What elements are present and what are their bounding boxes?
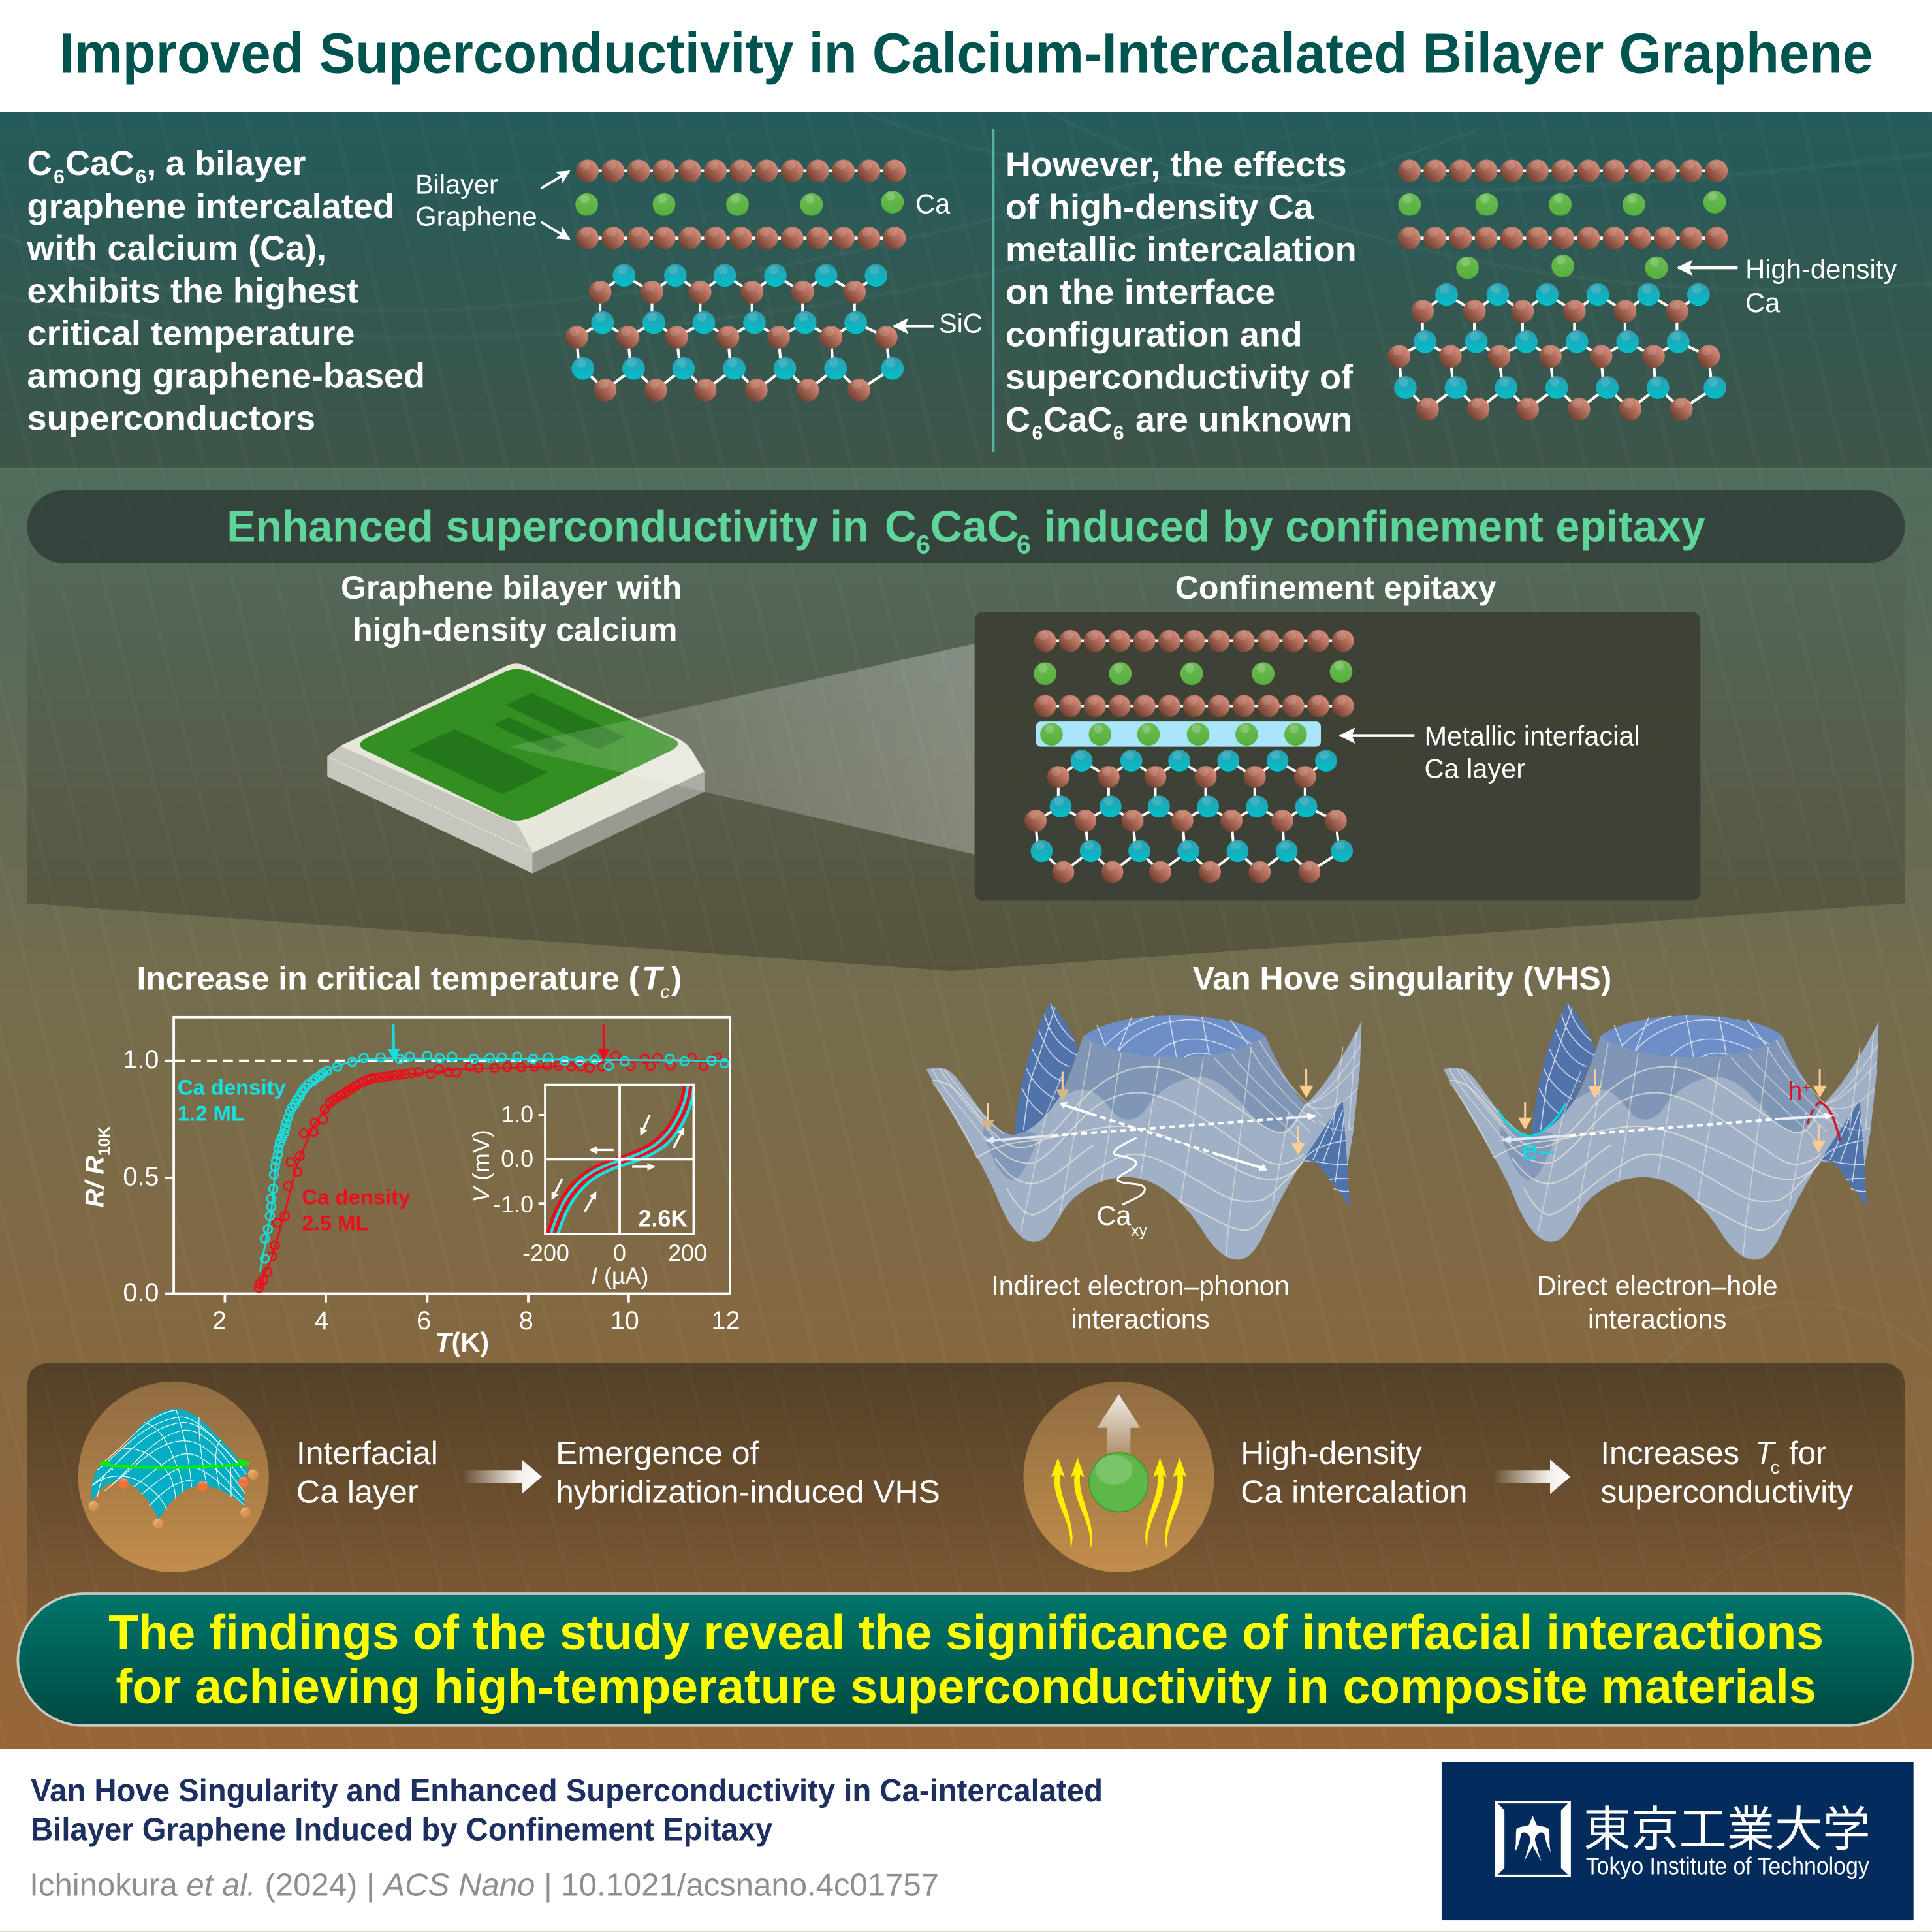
text block: C6CaC6 introduction: exhibits the highest [27, 272, 358, 310]
emblem [1495, 1801, 1571, 1877]
label: metallic interfacial Ca layer: Metallic interfacial [1425, 721, 1640, 752]
text block: C6CaC6 introduction: graphene intercalated [27, 187, 394, 226]
footer paper title: Bilayer Graphene Induced by Confinement Epitaxy [31, 1812, 773, 1847]
chart: R/R10K versus T [81, 1017, 740, 1357]
heading: increase in critical temperature: Increase in critical temperature ( [136, 960, 639, 996]
text: increases Tc: c [1771, 1457, 1780, 1478]
heading: increase in critical temperature: c [660, 981, 670, 1002]
footer paper title [31, 1773, 1103, 1847]
caption: indirect electron-phonon [991, 1270, 1290, 1334]
conclusion pill [18, 1594, 1913, 1726]
red series: 2.5 ML [259, 1056, 729, 1289]
heading: increase in critical temperature: ) [671, 960, 682, 996]
heading: Van Hove singularity: Van Hove singularity (VHS) [1193, 960, 1611, 996]
arrow: to high-density Ca [1678, 267, 1737, 268]
green Ca layer ring [101, 1461, 248, 1468]
icon: high-density Ca intercalation [1023, 1382, 1214, 1572]
dark pads [409, 693, 625, 795]
panel: background section of introduction [0, 112, 1932, 468]
x-axis labels: 10 [610, 1306, 639, 1335]
label: SiC: SiC [939, 308, 983, 339]
beam from chip to magnified view [509, 644, 975, 855]
calcium atoms [1034, 660, 1352, 685]
cyan series: 1.2 ML [260, 1056, 729, 1272]
y-axis labels: 0.5 [123, 1162, 159, 1191]
label: Ca density 1.2 ML: Ca density [178, 1075, 287, 1100]
interfacial calcium atoms [1040, 723, 1307, 746]
arrow: to SiC [894, 325, 934, 327]
heading: confinement epitaxy: Confinement epitaxy [1175, 569, 1497, 606]
inset y labels [493, 1101, 533, 1218]
arrow: peach markers [1518, 1069, 1827, 1153]
label: high-density Ca: High-density [1745, 253, 1897, 284]
metallic interfacial Ca band [1036, 721, 1321, 747]
footer paper title: Van Hove Singularity and Enhanced Superconductivity in Ca-intercalated [31, 1773, 1103, 1809]
3D band surface: indirect electron-phonon [926, 1002, 1362, 1259]
caption: indirect electron-phonon: Indirect electron–phonon [991, 1270, 1290, 1301]
inset temperature: 2.6K [639, 1206, 688, 1232]
panel: background section of results [0, 468, 1932, 1750]
conclusion text [108, 1605, 1824, 1714]
y-axis labels [123, 1045, 159, 1307]
text: increases Tc: Increases [1600, 1436, 1739, 1471]
SiC lattice [565, 264, 904, 402]
heading: enhanced superconductivity: CaC [930, 502, 1019, 551]
text block: unknown effects: CaC [1043, 400, 1113, 439]
text: high-density Ca intercalation: High-density [1241, 1436, 1422, 1471]
inset x labels: 0 [613, 1240, 626, 1266]
label: Ca density 1.2 ML [178, 1075, 287, 1125]
text block: unknown effects: 6 [1113, 423, 1124, 445]
arrow: peach markers [981, 1069, 1314, 1155]
footer background [0, 1749, 1932, 1932]
text block: C6CaC6 introduction: C [27, 144, 52, 183]
footer citation: Ichinokura et al. (2024) | ACS Nano | 10.1021/acsnano.4c01757 [29, 1867, 939, 1903]
text block: unknown effects: superconductivity of [1006, 358, 1353, 396]
text block: C6CaC6 introduction: 6 [54, 166, 65, 188]
y-axis title: 10K [96, 1126, 114, 1156]
caption: indirect electron-phonon: interactions [1071, 1303, 1210, 1334]
text: increases Tc [1600, 1436, 1854, 1510]
yellow flow arrows [1051, 1457, 1186, 1547]
text block: C6CaC6 introduction: critical temperature [27, 314, 355, 353]
x-axis labels: 4 [315, 1306, 329, 1335]
label: Ca xy phonon: Ca [1097, 1200, 1132, 1231]
text block: C6CaC6 introduction: CaC [65, 144, 135, 183]
curve: hole pocket [1806, 1102, 1841, 1141]
arrow: to upper graphene layer [541, 171, 569, 189]
x-axis labels [212, 1306, 740, 1335]
panel: key findings [27, 1363, 1905, 1664]
text: interfacial Ca layer [296, 1436, 438, 1510]
text block: unknown effects: on the interface [1006, 273, 1275, 311]
text block: C6CaC6 introduction: with calcium (Ca), [26, 229, 326, 268]
caption: direct electron-hole: interactions [1588, 1303, 1726, 1334]
conclusion text: The findings of the study reveal the significance of interfacial interactions [108, 1605, 1824, 1660]
label: hole: h [1788, 1077, 1802, 1105]
heading: graphene bilayer with high-density calcium: Graphene bilayer with [341, 569, 682, 606]
inset curves [547, 1082, 693, 1241]
SiC lattice [1387, 283, 1726, 420]
heading: increase in critical temperature: T [642, 960, 665, 996]
logo English name: Tokyo Institute of Technology [1586, 1852, 1869, 1879]
text block: C6CaC6 introduction: , a bilayer [147, 144, 306, 183]
text block: unknown effects: configuration and [1006, 315, 1303, 354]
lower graphene layer [1034, 695, 1354, 717]
label: Ca density 2.5 ML [302, 1185, 411, 1235]
arrow: cyan Tc marker [393, 1024, 394, 1060]
curve: electron pocket [1498, 1103, 1566, 1136]
icon: interfacial Ca layer surface [78, 1382, 269, 1572]
x-axis labels: 2 [212, 1306, 227, 1335]
text block: unknown effects: are unknown [1135, 400, 1352, 439]
caption: direct electron-hole [1537, 1270, 1778, 1334]
background: header white [0, 0, 1932, 112]
logo: Tokyo Institute of Technology [1442, 1762, 1914, 1920]
arrow: to lower graphene layer [541, 222, 569, 239]
text: increases Tc: superconductivity [1600, 1474, 1854, 1510]
label: metallic interfacial Ca layer: Ca layer [1425, 753, 1525, 784]
text: increases Tc: T [1754, 1436, 1776, 1471]
heading: enhanced superconductivity: C [885, 502, 917, 551]
label: bilayer graphene: Bilayer [415, 168, 498, 199]
text: high-density Ca intercalation [1241, 1436, 1468, 1510]
orange atoms [89, 1470, 258, 1528]
upper graphene layer [1398, 159, 1728, 182]
text block: C6CaC6 introduction [26, 144, 425, 438]
upper graphene layer [1034, 630, 1354, 652]
caption: direct electron-hole: Direct electron–hole [1537, 1270, 1778, 1301]
label: Ca density 2.5 ML: 2.5 ML [302, 1211, 368, 1235]
text block: unknown effects [1006, 146, 1357, 445]
inset arrows [552, 1115, 684, 1212]
arrow: leads to Tc increase [1495, 1459, 1570, 1494]
interfacial calcium atoms [1456, 255, 1668, 279]
label: xy subscript: xy [1131, 1222, 1148, 1240]
label: bilayer graphene: Graphene [415, 200, 537, 231]
text: increases Tc: for [1789, 1436, 1826, 1471]
text block: unknown effects: of high-density Ca [1006, 188, 1314, 227]
logo Japanese name: 東京工業大学 [1583, 1803, 1871, 1856]
green graphene surface [360, 669, 678, 821]
label: electron: e– [1522, 1135, 1554, 1166]
inset y title: V (mV) [468, 1130, 494, 1203]
inset y labels: 0.0 [501, 1146, 533, 1172]
arrow: diagonal scattering [1060, 1102, 1267, 1171]
inset x labels: 200 [668, 1240, 707, 1266]
inset x title: I (µA) [591, 1263, 648, 1289]
text block: C6CaC6 introduction: superconductors [27, 400, 315, 438]
diagram: bilayer graphene with calcium on SiC [415, 159, 983, 402]
calcium atoms in the gallery [1399, 191, 1726, 216]
green Ca ball [1089, 1453, 1148, 1512]
label: bilayer graphene [415, 168, 537, 231]
arrow: leads to VHS [464, 1459, 542, 1494]
heading: enhanced superconductivity: 6 [1017, 530, 1031, 559]
lower graphene layer [1398, 227, 1728, 249]
heading: enhanced superconductivity: Enhanced superconductivity in [227, 502, 868, 551]
y-axis title: R/ R [81, 1156, 110, 1207]
text block: unknown effects: C [1006, 400, 1030, 439]
calcium atoms [575, 191, 904, 216]
heading: enhanced superconductivity: induced by confinement epitaxy [1043, 502, 1705, 551]
chevron panel behind confinement epitaxy [27, 528, 1905, 971]
lower graphene layer [576, 227, 906, 249]
text: interfacial Ca layer: Ca layer [296, 1474, 419, 1510]
text: hybridization-induced VHS [556, 1436, 940, 1510]
inset: V-I curve [468, 1082, 707, 1289]
heading: enhanced superconductivity [227, 502, 1705, 559]
text block: unknown effects: metallic intercalation [1006, 230, 1357, 269]
diagram: high-density Ca intercalation [1387, 159, 1897, 420]
inset x labels [522, 1240, 707, 1266]
arrow: direct scattering [1501, 1113, 1834, 1143]
3D band surface: direct electron-hole [1443, 1002, 1879, 1259]
heading: enhanced superconductivity: 6 [916, 530, 930, 559]
title: Improved Superconductivity in Calcium-Intercalated Bilayer Graphene [59, 22, 1873, 85]
unity reference line [175, 1060, 729, 1062]
arrow: red Tc marker [603, 1024, 605, 1060]
x-axis labels: 6 [417, 1306, 431, 1335]
inset y labels: -1.0 [493, 1192, 533, 1218]
x-axis title: T(K) [435, 1327, 489, 1357]
inset y labels: 1.0 [501, 1101, 533, 1128]
divider between introduction columns [992, 129, 994, 452]
label: Ca density 1.2 ML: 1.2 ML [178, 1101, 244, 1125]
label: high-density Ca: Ca [1745, 287, 1781, 318]
upper graphene layer [576, 159, 906, 182]
heading: graphene bilayer with high-density calcium [341, 569, 682, 648]
text: high-density Ca intercalation: Ca intercalation [1241, 1474, 1468, 1510]
axis ticks [165, 1061, 629, 1303]
text: interfacial Ca layer: Interfacial [296, 1436, 438, 1471]
y-axis labels: 1.0 [123, 1045, 159, 1074]
upward arrow [1097, 1394, 1141, 1460]
label: high-density Ca [1745, 253, 1897, 318]
text block: unknown effects: 6 [1032, 423, 1043, 445]
conclusion text: for achieving high-temperature superconductivity in composite materials [116, 1659, 1816, 1714]
label: Ca density 2.5 ML: Ca density [302, 1185, 411, 1209]
arrow: horizontal scattering [984, 1113, 1318, 1143]
arrow: to metallic layer [1340, 735, 1414, 736]
y-axis labels: 0.0 [123, 1278, 159, 1307]
label: Ca: Ca [915, 188, 951, 219]
text block: unknown effects: However, the effects [1006, 146, 1347, 184]
SiC lattice [1024, 750, 1353, 883]
heading pill [27, 490, 1905, 563]
text block: C6CaC6 introduction: among graphene-based [27, 356, 425, 395]
wiggle: phonon [1114, 1138, 1145, 1205]
label: hole: + [1802, 1079, 1811, 1096]
x-axis labels: 12 [711, 1306, 740, 1335]
heading: graphene bilayer with high-density calcium: high-density calcium [353, 611, 677, 648]
illustration: graphene device chip [327, 663, 705, 874]
panel: confinement epitaxy magnified view [975, 612, 1700, 900]
text: hybridization-induced VHS: Emergence of [556, 1436, 759, 1471]
x-axis labels: 8 [519, 1306, 533, 1335]
text block: C6CaC6 introduction: 6 [136, 166, 146, 188]
label: metallic interfacial Ca layer [1425, 721, 1640, 784]
inset x labels: -200 [522, 1240, 569, 1266]
teal band surface [89, 1409, 258, 1528]
text: hybridization-induced VHS: hybridization-induced VHS [556, 1474, 940, 1510]
